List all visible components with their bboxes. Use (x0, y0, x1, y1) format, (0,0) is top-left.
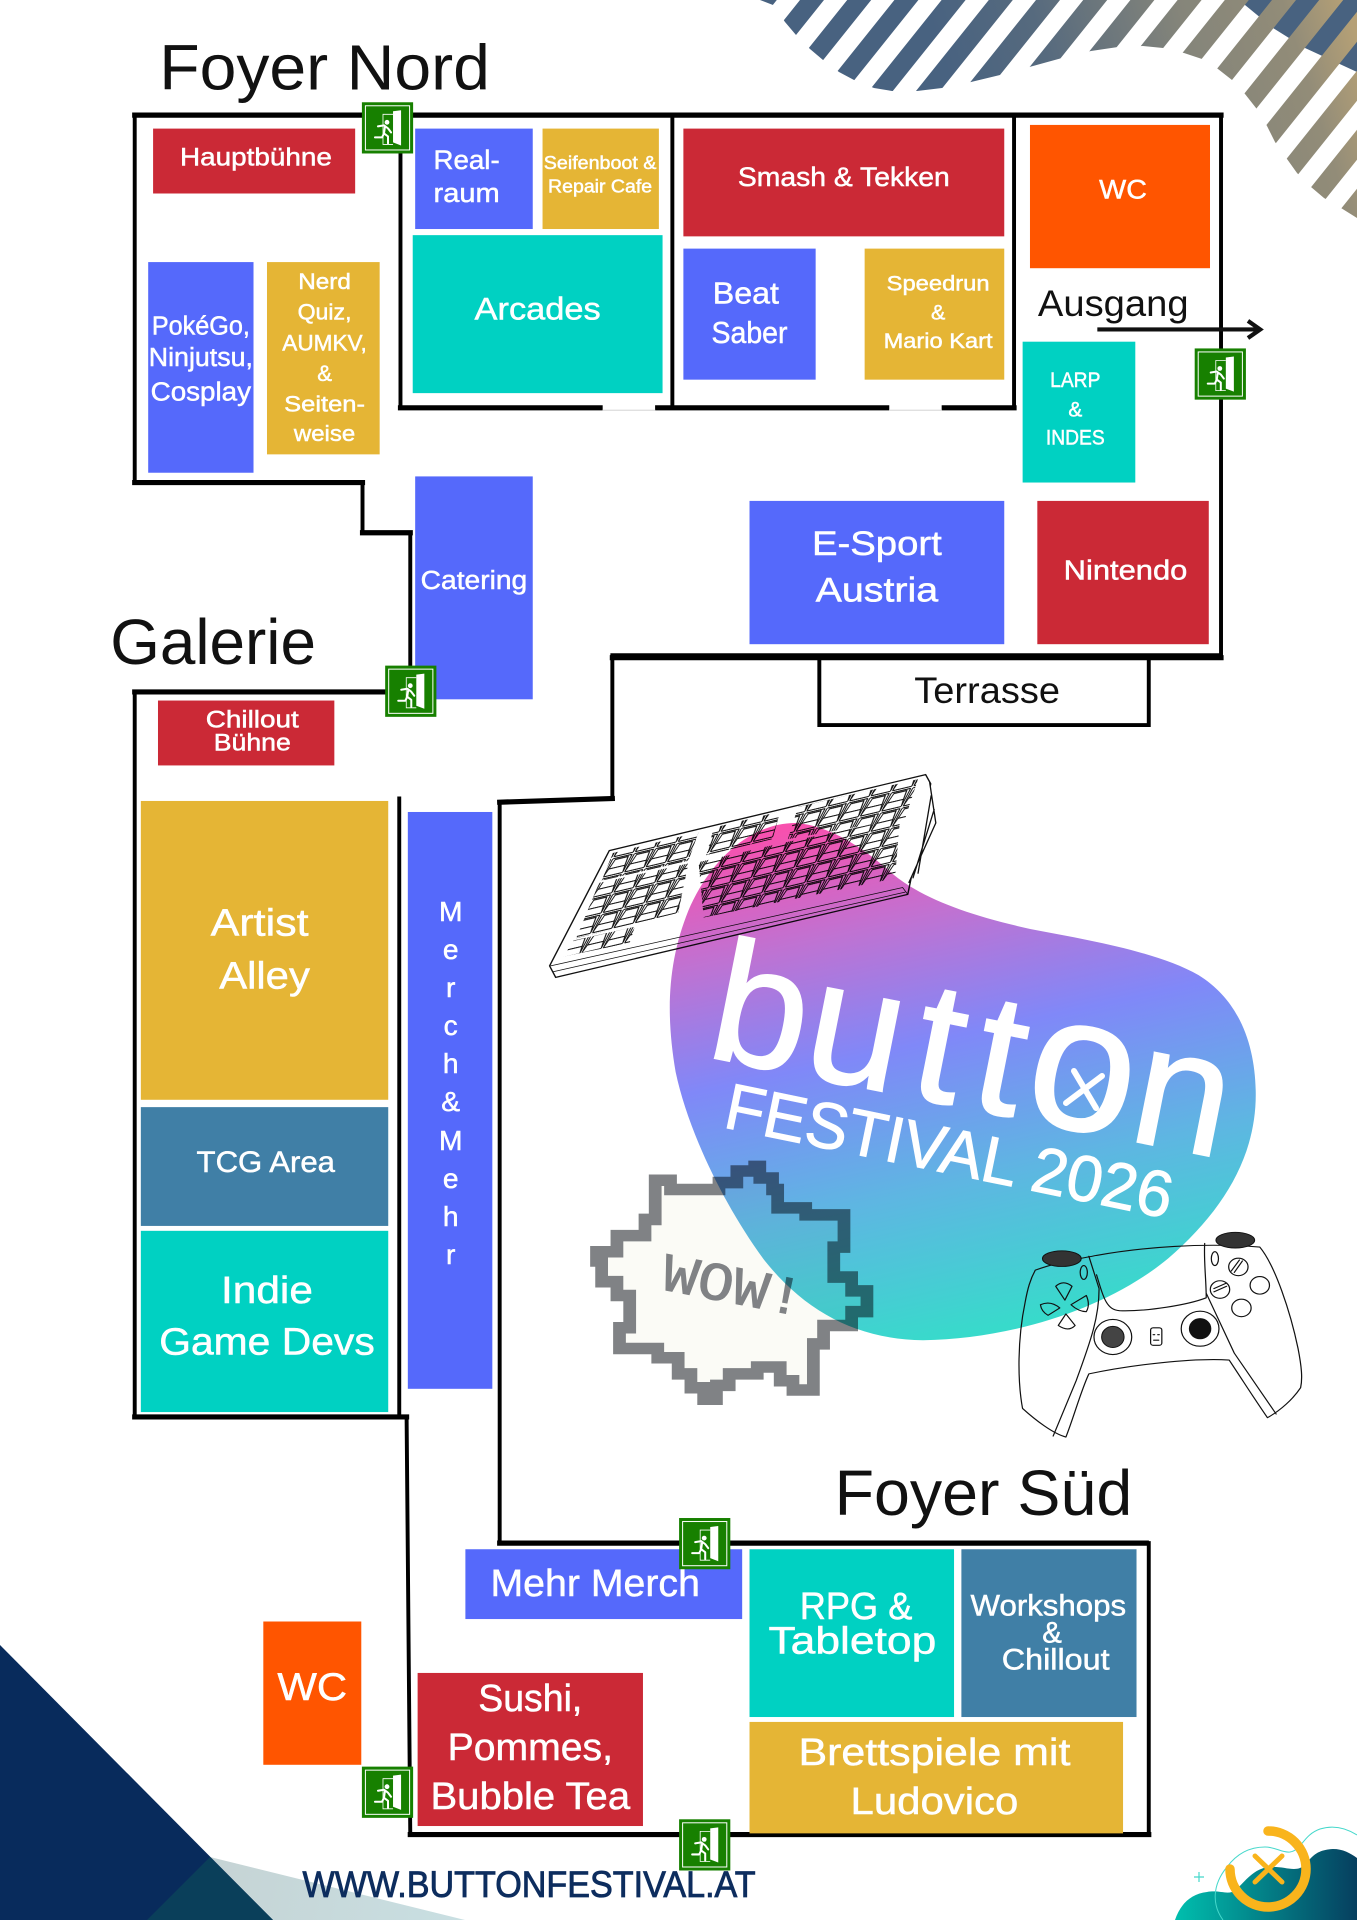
decoration: bottom right logo (1175, 1827, 1357, 1920)
room: Brettspiele mit Ludovico (750, 1722, 1123, 1833)
room: Beat Saber: Saber (712, 316, 787, 350)
room: WC Süd: WC (277, 1666, 347, 1709)
logo wordmark: button (696, 885, 1253, 1198)
room: Seifenboot und Repair Cafe (543, 129, 659, 229)
room: Hauptbühne: Hauptbühne (180, 143, 332, 171)
icon: emergency exit, WC (362, 1767, 413, 1818)
room: RPG und Tabletop (750, 1549, 954, 1717)
icon: emergency exit, Foyer Süd top (679, 1518, 730, 1569)
website address: WWW.BUTTONFESTIVAL.AT (303, 1864, 756, 1905)
room: Nintendo (1037, 501, 1209, 644)
room: Merch und Mehr: h (443, 1201, 459, 1232)
room: Workshops und Chillout: & (1042, 1616, 1062, 1649)
room: Artist Alley (141, 801, 388, 1100)
room: Sushi Pommes Bubble Tea (418, 1673, 643, 1826)
room: Nerd Quiz (267, 262, 380, 454)
room: Sushi Pommes Bubble Tea: Sushi, (478, 1678, 582, 1720)
room: PokéGo Ninjutsu Cosplay (148, 262, 254, 473)
heading: Galerie: Galerie (110, 607, 316, 678)
walls: building outline (135, 115, 1221, 1835)
logo wordmark: button: t (899, 944, 983, 1142)
room: Smash und Tekken: Smash & Tekken (738, 162, 950, 192)
room: Smash und Tekken (683, 129, 1004, 236)
room: Seifenboot und Repair Cafe: Repair Cafe (548, 175, 652, 196)
room: Nerd Quiz: weise (293, 421, 355, 446)
room: Merch und Mehr: h (443, 1048, 459, 1079)
room: Indie Game Devs: Game Devs (159, 1322, 375, 1364)
room: Realraum: raum (434, 178, 500, 208)
room: Speedrun und Mario Kart (865, 249, 1004, 380)
room: Workshops und Chillout: Chillout (1002, 1643, 1110, 1676)
room: Brettspiele mit Ludovico: Ludovico (851, 1781, 1018, 1823)
room: Nerd Quiz: Seiten- (284, 391, 365, 416)
room: Seifenboot und Repair Cafe: Seifenboot & (544, 152, 656, 173)
room: Beat Saber (683, 249, 816, 380)
room: Merch und Mehr: e (443, 934, 459, 965)
room: Merch und Mehr (408, 812, 492, 1389)
logo wordmark: button: o (1012, 948, 1158, 1180)
room: PokéGo Ninjutsu Cosplay: Ninjutsu, (149, 344, 253, 372)
room: Speedrun und Mario Kart: & (931, 301, 945, 325)
room: Arcades: Arcades (475, 291, 601, 327)
room: Sushi Pommes Bubble Tea: Bubble Tea (430, 1776, 631, 1818)
room: Realraum (415, 129, 533, 229)
logo wordmark: button: b (697, 904, 828, 1111)
room: PokéGo Ninjutsu Cosplay: Cosplay (151, 378, 251, 406)
keyboard illustration (550, 775, 936, 977)
wow text: WOW! (657, 1246, 809, 1333)
wow pixel star (597, 1166, 867, 1399)
heading: Foyer Nord: Foyer Nord (159, 32, 490, 103)
logo wordmark: button: t (960, 956, 1044, 1154)
room: Artist Alley: Artist (211, 903, 309, 945)
game controller illustration (1019, 1232, 1302, 1437)
label: Ausgang: Ausgang (1038, 283, 1189, 324)
room: Indie Game Devs (141, 1231, 388, 1412)
heading: Foyer Süd: Foyer Süd (835, 1458, 1132, 1529)
room: Catering (415, 476, 533, 699)
room: Beat Saber: Beat (713, 277, 779, 311)
room: RPG und Tabletop: RPG & (800, 1586, 912, 1628)
room: WC Süd (263, 1622, 361, 1765)
room: LARP und INDES: INDES (1046, 427, 1105, 450)
room: LARP und INDES: LARP (1050, 369, 1100, 392)
decoration: striped shape top right (760, 0, 1357, 218)
room: Speedrun und Mario Kart: Mario Kart (884, 329, 993, 353)
room: Sushi Pommes Bubble Tea: Pommes, (448, 1727, 613, 1769)
room: Merch und Mehr: c (444, 1010, 458, 1041)
room: Nerd Quiz: Quiz, (298, 300, 351, 325)
room: WC Nord: WC (1099, 174, 1147, 204)
room: Catering: Catering (421, 567, 527, 595)
room: Workshops und Chillout (961, 1549, 1137, 1717)
icon: emergency exit, Foyer Süd bottom (679, 1819, 730, 1871)
room: Nintendo: Nintendo (1064, 554, 1187, 585)
room: Chillout Bühne: Chillout (206, 706, 299, 733)
label: Terrasse: Terrasse (914, 670, 1060, 711)
room: Chillout Bühne (158, 701, 334, 765)
room: Speedrun und Mario Kart: Speedrun (887, 271, 990, 295)
room: LARP und INDES: & (1068, 398, 1082, 421)
logo wordmark: button: u (792, 923, 923, 1130)
room: E-Sport Austria: E-Sport (812, 525, 942, 563)
room: Hauptbühne (153, 129, 355, 194)
room: Merch und Mehr: e (443, 1163, 459, 1194)
room: LARP und INDES (1023, 342, 1135, 483)
icon: emergency exit, Foyer Nord (362, 102, 413, 153)
room: E-Sport Austria (750, 501, 1004, 644)
room: TCG Area (141, 1107, 388, 1226)
room: Chillout Bühne: Bühne (214, 730, 291, 757)
room: Nerd Quiz: & (317, 361, 332, 386)
logo subtitle: festival 2026: FESTIVAL 2026 (719, 1069, 1180, 1232)
room: TCG Area: TCG Area (197, 1146, 336, 1179)
room: PokéGo Ninjutsu Cosplay: PokéGo, (152, 312, 250, 340)
decoration: bottom left triangles (0, 1645, 465, 1920)
room: E-Sport Austria: Austria (816, 571, 939, 609)
room: WC Nord (1030, 125, 1210, 268)
room: Merch und Mehr: M (439, 1125, 462, 1156)
icon: emergency exit, Ausgang (1195, 348, 1246, 400)
arrow: exit (1097, 321, 1260, 338)
room: Arcades (413, 235, 663, 393)
room: Merch und Mehr: M (439, 896, 462, 927)
room: RPG und Tabletop: Tabletop (768, 1620, 936, 1662)
room: Artist Alley: Alley (219, 955, 310, 997)
room: Nerd Quiz: Nerd (298, 269, 351, 294)
room: Workshops und Chillout: Workshops (971, 1589, 1126, 1622)
room: Realraum: Real- (434, 145, 500, 175)
gradient blob (670, 823, 1256, 1340)
room: Indie Game Devs: Indie (221, 1270, 313, 1312)
room: Merch und Mehr: r (446, 972, 455, 1003)
room: Merch und Mehr: r (446, 1239, 455, 1270)
room: Mehr Merch: Mehr Merch (490, 1563, 700, 1605)
logo wordmark: button: n (1119, 987, 1250, 1194)
room: Nerd Quiz: AUMKV, (282, 330, 367, 355)
icon: emergency exit, Galerie (385, 666, 436, 717)
room: Brettspiele mit Ludovico: Brettspiele mit (799, 1732, 1071, 1774)
room: Merch und Mehr: & (441, 1086, 460, 1117)
room: Mehr Merch (465, 1549, 742, 1619)
